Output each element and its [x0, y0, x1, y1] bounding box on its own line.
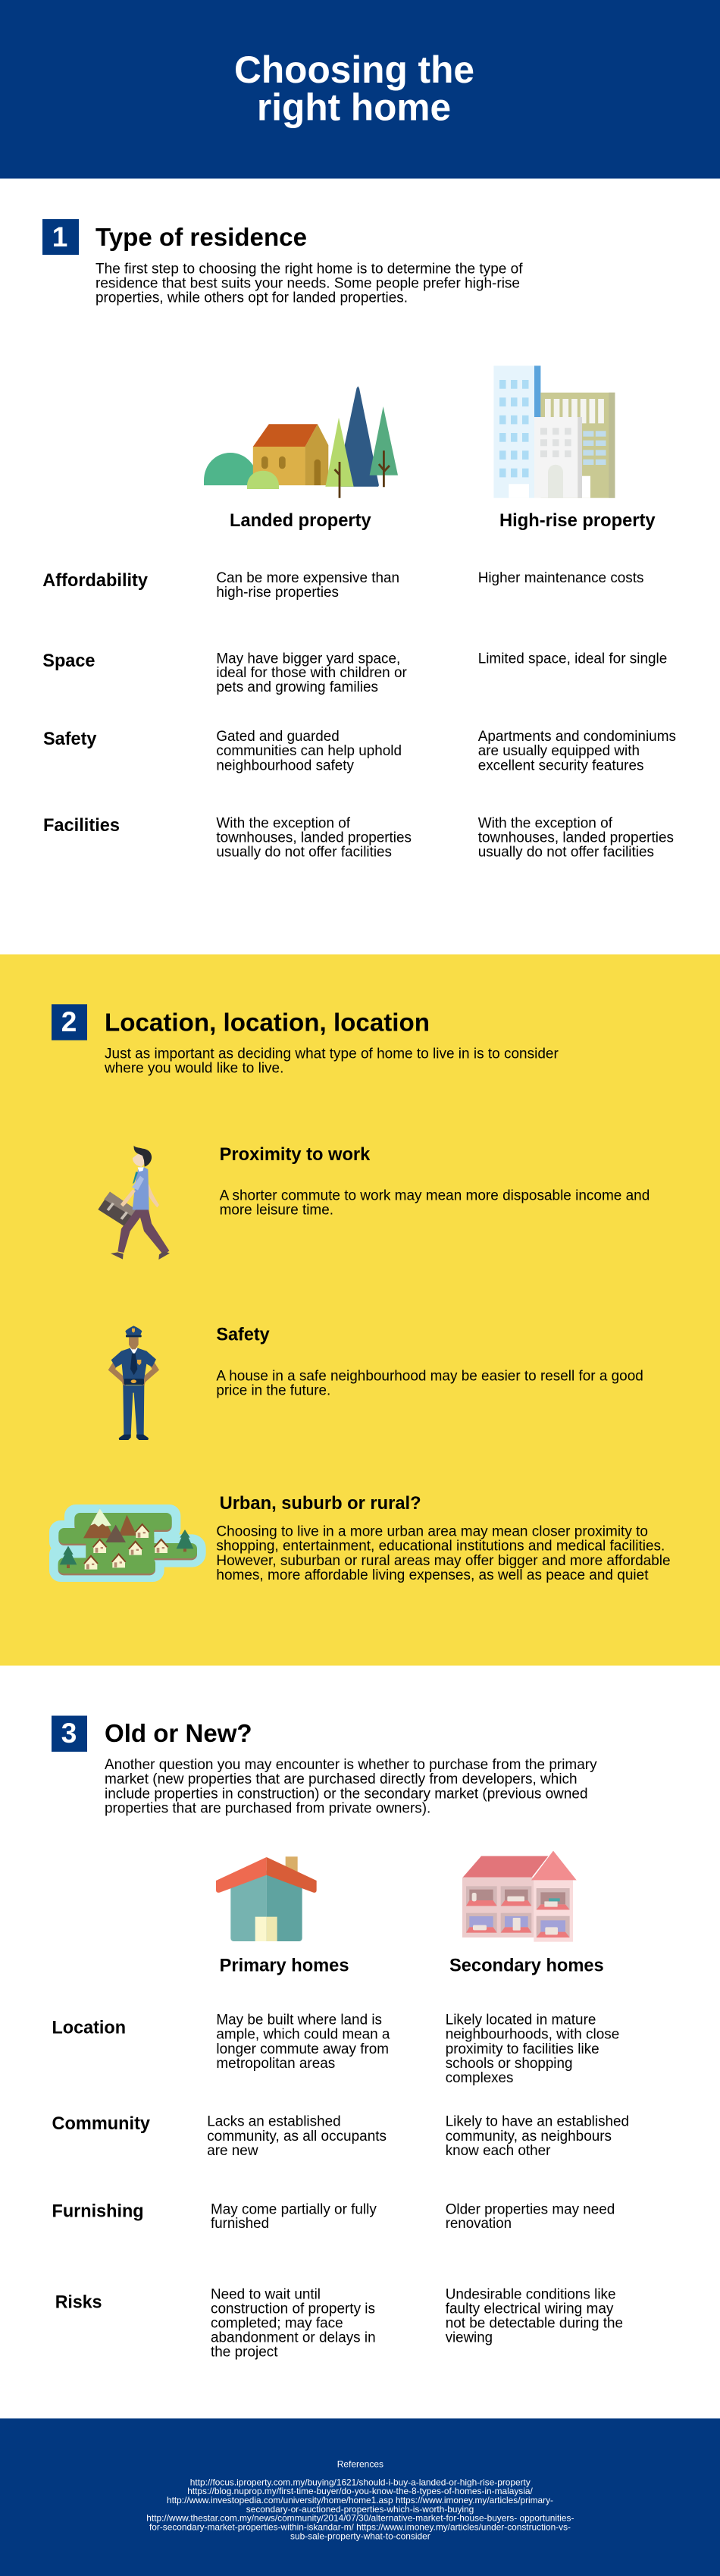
number badge 2: 2	[61, 1006, 77, 1037]
row: location: ample, which could mean a	[216, 2027, 390, 2043]
number badge 3: 3	[61, 1718, 77, 1749]
icon: high-rise buildings	[493, 366, 615, 498]
row: facilities	[43, 815, 674, 860]
label: proximity to work: Proximity to work	[220, 1144, 371, 1165]
row: affordability: Higher maintenance costs	[478, 570, 644, 586]
row: community: community, as all occupants	[207, 2129, 387, 2145]
row: location: metropolitan areas	[216, 2056, 335, 2072]
icon: landed house with trees	[204, 386, 398, 498]
title: Choosing the	[234, 49, 474, 91]
row: furnishing: renovation	[446, 2216, 512, 2232]
intro text	[105, 1757, 597, 1817]
references list: for-secondary-market-properties-within-iskandar-m/ https://www.imoney.my/articles/under-construction-vs-	[149, 2522, 571, 2533]
row: risks: abandonment or delays in	[211, 2330, 376, 2346]
row: risks: viewing	[446, 2330, 493, 2346]
text: urban, suburb or rural: homes, more affordable living expenses, as well as peace and quiet	[216, 1567, 649, 1583]
header banner	[0, 0, 720, 179]
intro text: properties that are purchased from private owners).	[105, 1801, 430, 1817]
row: facilities: townhouses, landed properties	[216, 830, 412, 846]
row: community: are new	[207, 2143, 258, 2159]
references list	[146, 2477, 574, 2542]
text: proximity to work: more leisure time.	[220, 1202, 333, 1218]
row: facilities: usually do not offer facilities	[478, 844, 654, 860]
panel: type of residence	[42, 219, 676, 860]
row: space: Space	[42, 651, 95, 671]
heading: type of residence: Type of residence	[95, 223, 307, 251]
row: space: ideal for those with children or	[216, 665, 407, 681]
text: safety	[216, 1369, 643, 1399]
intro text: residence that best suits your needs. Some people prefer high-rise	[95, 276, 520, 292]
row: location: longer commute away from	[216, 2041, 389, 2057]
title	[234, 49, 474, 128]
row: risks: Risks	[55, 2292, 102, 2312]
intro text: market (new properties that are purchased directly from developers, which	[105, 1771, 578, 1787]
row: facilities: With the exception of	[216, 815, 351, 831]
row: risks: Need to wait until	[211, 2286, 321, 2302]
text: urban, suburb or rural: However, suburban or rural areas may offer bigger and more affordable	[216, 1553, 671, 1569]
references list: http://www.investopedia.com/university/home/home1.asp https://www.imoney.my/articles/primary-	[167, 2495, 553, 2505]
title: right home	[257, 86, 451, 128]
references list: http://focus.iproperty.com.my/buying/1621/should-i-buy-a-landed-or-high-rise-property	[190, 2477, 531, 2487]
panel: old or new	[52, 1715, 629, 2361]
row: safety: Safety	[43, 729, 97, 749]
row: risks: the project	[211, 2345, 278, 2361]
row: space	[42, 651, 667, 695]
number badge 3	[52, 1715, 87, 1752]
intro text: properties, while others opt for landed properties.	[95, 290, 408, 306]
intro text	[104, 1046, 559, 1077]
row: facilities: usually do not offer facilities	[216, 844, 392, 860]
row: furnishing: Furnishing	[52, 2201, 144, 2222]
row: location: complexes	[446, 2070, 513, 2086]
row: space: Limited space, ideal for single	[478, 651, 667, 667]
references list: http://www.thestar.com.my/news/community/2014/07/30/alternative-market-for-house-buyers- opportunities-	[146, 2513, 574, 2524]
row: safety	[43, 729, 676, 773]
panel: location	[0, 954, 720, 1665]
row: safety: neighbourhood safety	[216, 758, 354, 773]
row: community: Lacks an established	[207, 2114, 341, 2130]
label: safety: Safety	[216, 1324, 270, 1345]
row: location: neighbourhoods, with close	[446, 2027, 619, 2043]
row: risks: faulty electrical wiring may	[446, 2301, 614, 2317]
footer: references	[0, 2418, 720, 2576]
number badge 1: 1	[52, 221, 67, 253]
row: facilities: townhouses, landed properties	[478, 830, 674, 846]
row: community: community, as neighbours	[446, 2129, 612, 2145]
row: affordability: high-rise properties	[216, 585, 339, 601]
row: location: schools or shopping	[446, 2056, 573, 2072]
row: community: know each other	[446, 2143, 551, 2159]
row: location: May be built where land is	[216, 2013, 382, 2028]
row: space: pets and growing families	[216, 679, 378, 695]
row: furnishing: furnished	[211, 2216, 269, 2232]
references heading: References	[337, 2458, 383, 2469]
references list: secondary-or-auctioned-properties-which-is-worth-buying	[246, 2504, 474, 2515]
row: space: May have bigger yard space,	[216, 651, 400, 667]
row: location: Likely located in mature	[446, 2013, 596, 2028]
row: furnishing	[52, 2201, 615, 2232]
icon: walking commuter with briefcase	[98, 1146, 170, 1260]
text: urban, suburb or rural: Choosing to live in a more urban area may mean closer proximity to	[216, 1524, 648, 1540]
label: landed property: Landed property	[230, 510, 371, 531]
heading: location, location, location: Location, location, location	[105, 1008, 430, 1036]
icon: secondary home	[462, 1851, 577, 1942]
intro text	[95, 261, 523, 306]
row: safety: Apartments and condominiums	[478, 729, 676, 745]
number badge 1	[42, 219, 79, 255]
row: risks: construction of property is	[211, 2301, 375, 2317]
label: primary homes: Primary homes	[220, 1955, 349, 1975]
intro text: Just as important as deciding what type of home to live in is to consider	[105, 1046, 559, 1062]
row: risks: Undesirable conditions like	[446, 2286, 615, 2302]
label: high-rise property: High-rise property	[499, 510, 656, 531]
row: location	[52, 2013, 619, 2086]
text: proximity to work	[220, 1188, 650, 1218]
row: risks: completed; may face	[211, 2316, 343, 2332]
row: location: Location	[52, 2017, 126, 2038]
row: safety: Gated and guarded	[216, 729, 340, 745]
icon: primary home	[216, 1856, 317, 1941]
row: community	[52, 2113, 629, 2159]
text: safety: A house in a safe neighbourhood may be easier to resell for a good	[216, 1369, 643, 1385]
row: affordability: Affordability	[42, 570, 149, 591]
label: secondary homes: Secondary homes	[449, 1955, 604, 1975]
row: facilities: With the exception of	[478, 815, 613, 831]
text: proximity to work: A shorter commute to work may mean more disposable income and	[220, 1188, 650, 1204]
text: safety: price in the future.	[216, 1383, 330, 1399]
label: urban, suburb or rural: Urban, suburb or rural?	[220, 1493, 421, 1514]
row: risks: not be detectable during the	[446, 2316, 623, 2332]
row: affordability	[42, 570, 644, 601]
row: safety: excellent security features	[478, 758, 644, 773]
row: community: Community	[52, 2113, 151, 2134]
row: risks	[55, 2286, 623, 2361]
row: furnishing: Older properties may need	[446, 2201, 615, 2217]
heading: old or new: Old or New?	[105, 1719, 252, 1747]
intro text: include properties in construction) or the secondary market (previous owned	[105, 1786, 588, 1802]
row: community: Likely to have an established	[446, 2114, 629, 2130]
text: urban, suburb or rural	[216, 1524, 671, 1583]
row: furnishing: May come partially or fully	[211, 2201, 377, 2217]
row: facilities: Facilities	[43, 815, 120, 836]
intro text: The first step to choosing the right home is to determine the type of	[95, 261, 523, 277]
icon: police officer	[108, 1326, 159, 1440]
intro text: where you would like to live.	[104, 1061, 283, 1077]
row: location: proximity to facilities like	[446, 2041, 599, 2057]
row: affordability: Can be more expensive than	[216, 570, 399, 586]
row: safety: communities can help uphold	[216, 743, 402, 759]
references list: sub-sale-property-what-to-consider	[290, 2531, 430, 2542]
references list: https://blog.nuprop.my/first-time-buyer/do-you-know-the-8-types-of-homes-in-malaysia/	[187, 2486, 533, 2496]
row: safety: are usually equipped with	[478, 743, 640, 759]
text: urban, suburb or rural: shopping, entertainment, educational institutions and medical facilities.	[216, 1539, 665, 1555]
intro text: Another question you may encounter is whether to purchase from the primary	[105, 1757, 597, 1773]
icon: village island	[49, 1504, 206, 1582]
number badge 2	[52, 1004, 87, 1040]
